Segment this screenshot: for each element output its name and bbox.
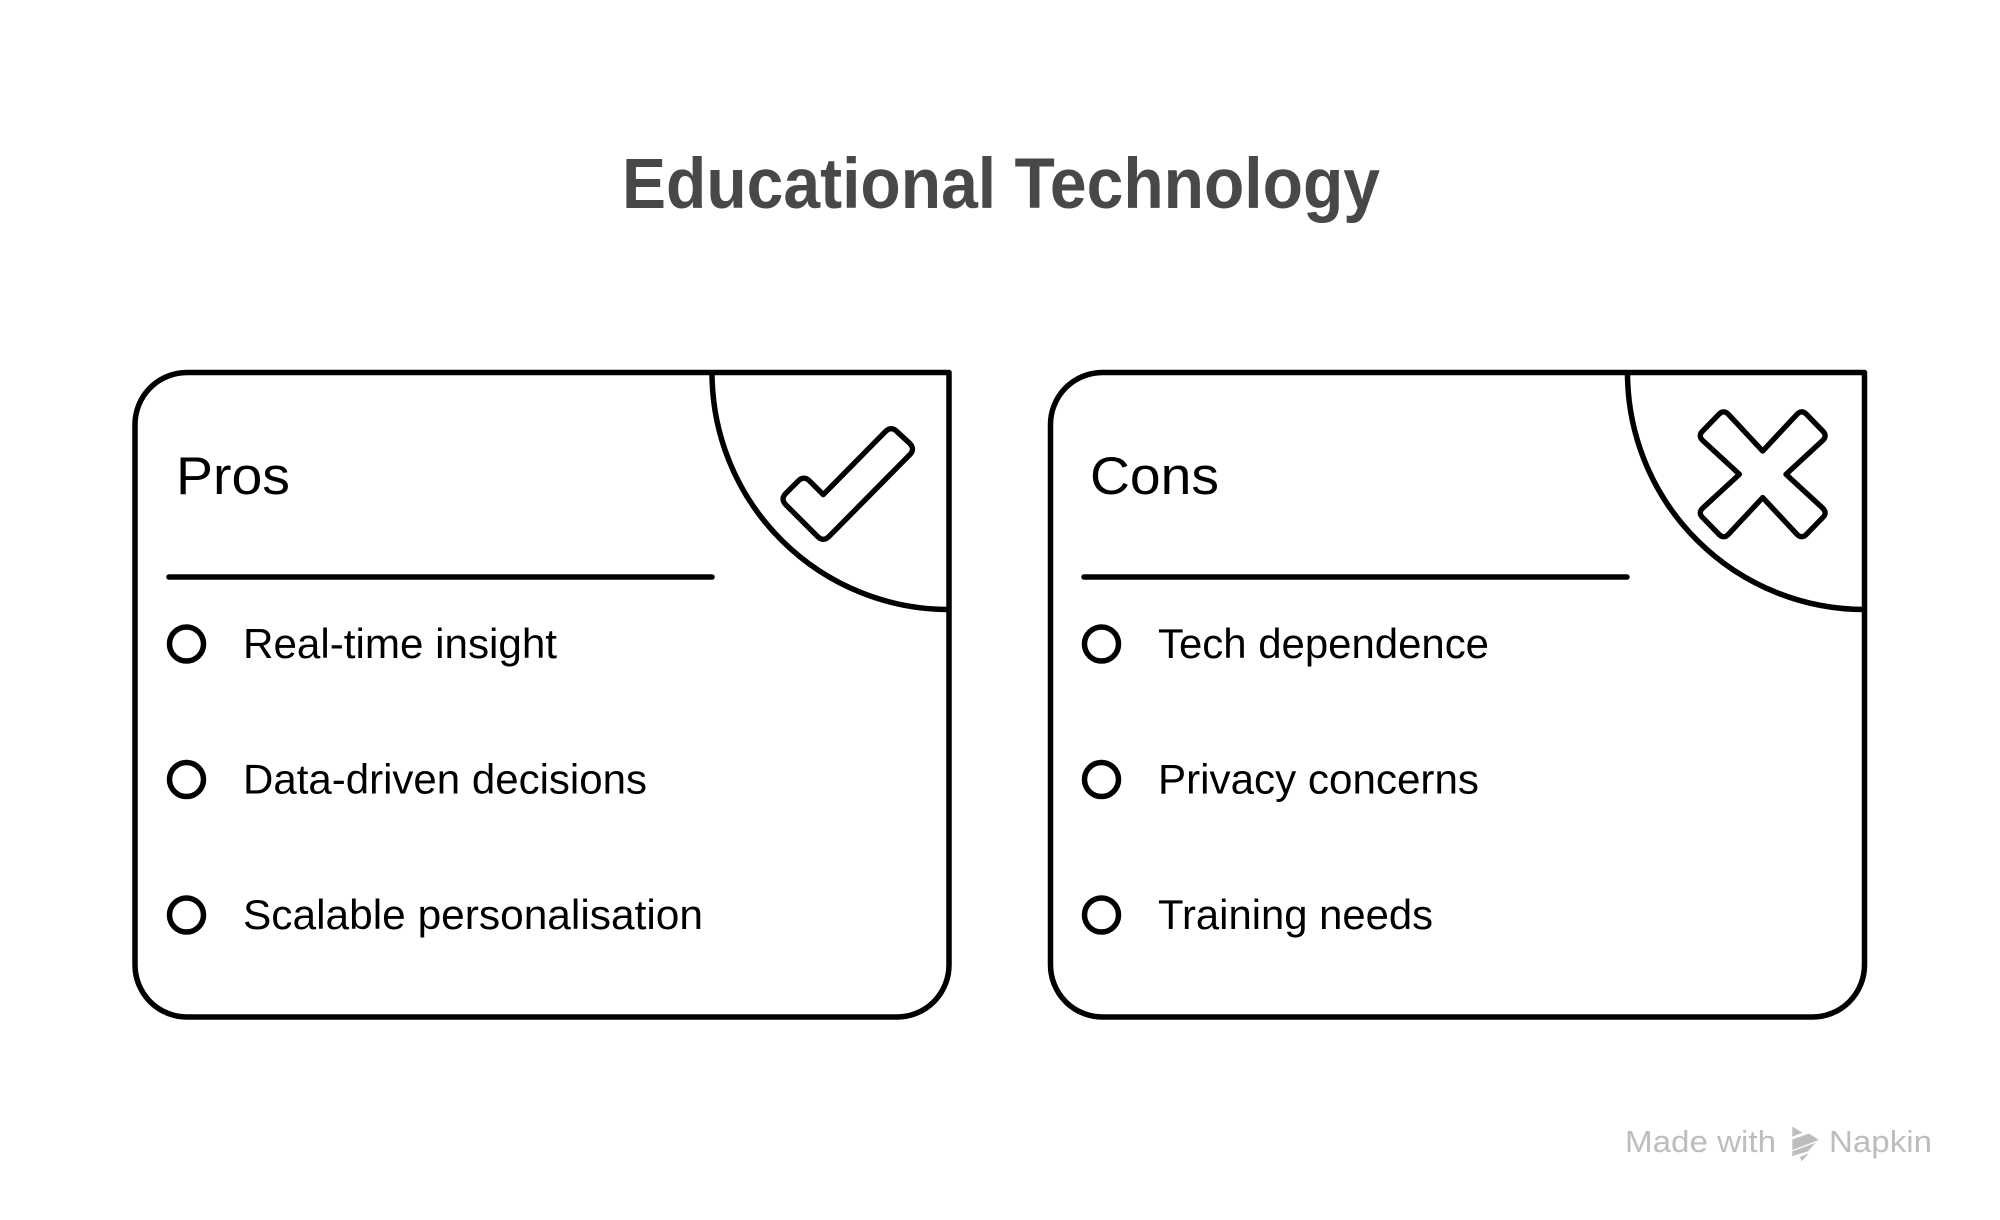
pros card outline bbox=[135, 372, 949, 1017]
pros item: scalable personalisation: Scalable personalisation bbox=[243, 891, 703, 938]
pros item: real-time insight: Real-time insight bbox=[243, 620, 557, 667]
panel: pros bbox=[135, 372, 949, 1017]
watermark: Napkin bbox=[1829, 1124, 1932, 1159]
cons item: tech dependence: Tech dependence bbox=[1158, 620, 1489, 667]
cons corner arc bbox=[1628, 372, 1864, 610]
cons item: training needs: Training needs bbox=[1158, 891, 1433, 938]
icon: check mark bbox=[783, 429, 913, 539]
watermark bbox=[1625, 1124, 1932, 1161]
icon: cross mark bbox=[1700, 412, 1825, 537]
cons heading: Cons bbox=[1090, 447, 1219, 506]
pros heading: Pros bbox=[176, 447, 290, 506]
cons card outline bbox=[1050, 372, 1864, 1017]
watermark: Made with bbox=[1625, 1124, 1776, 1159]
icon: napkin logo bbox=[1792, 1127, 1819, 1161]
pros item: data-driven decisions: Data-driven decisions bbox=[243, 756, 647, 802]
cons item: privacy concerns: Privacy concerns bbox=[1158, 756, 1479, 802]
panel: cons bbox=[1050, 372, 1864, 1017]
pros corner arc bbox=[712, 372, 949, 610]
title: Educational Technology bbox=[622, 145, 1380, 224]
